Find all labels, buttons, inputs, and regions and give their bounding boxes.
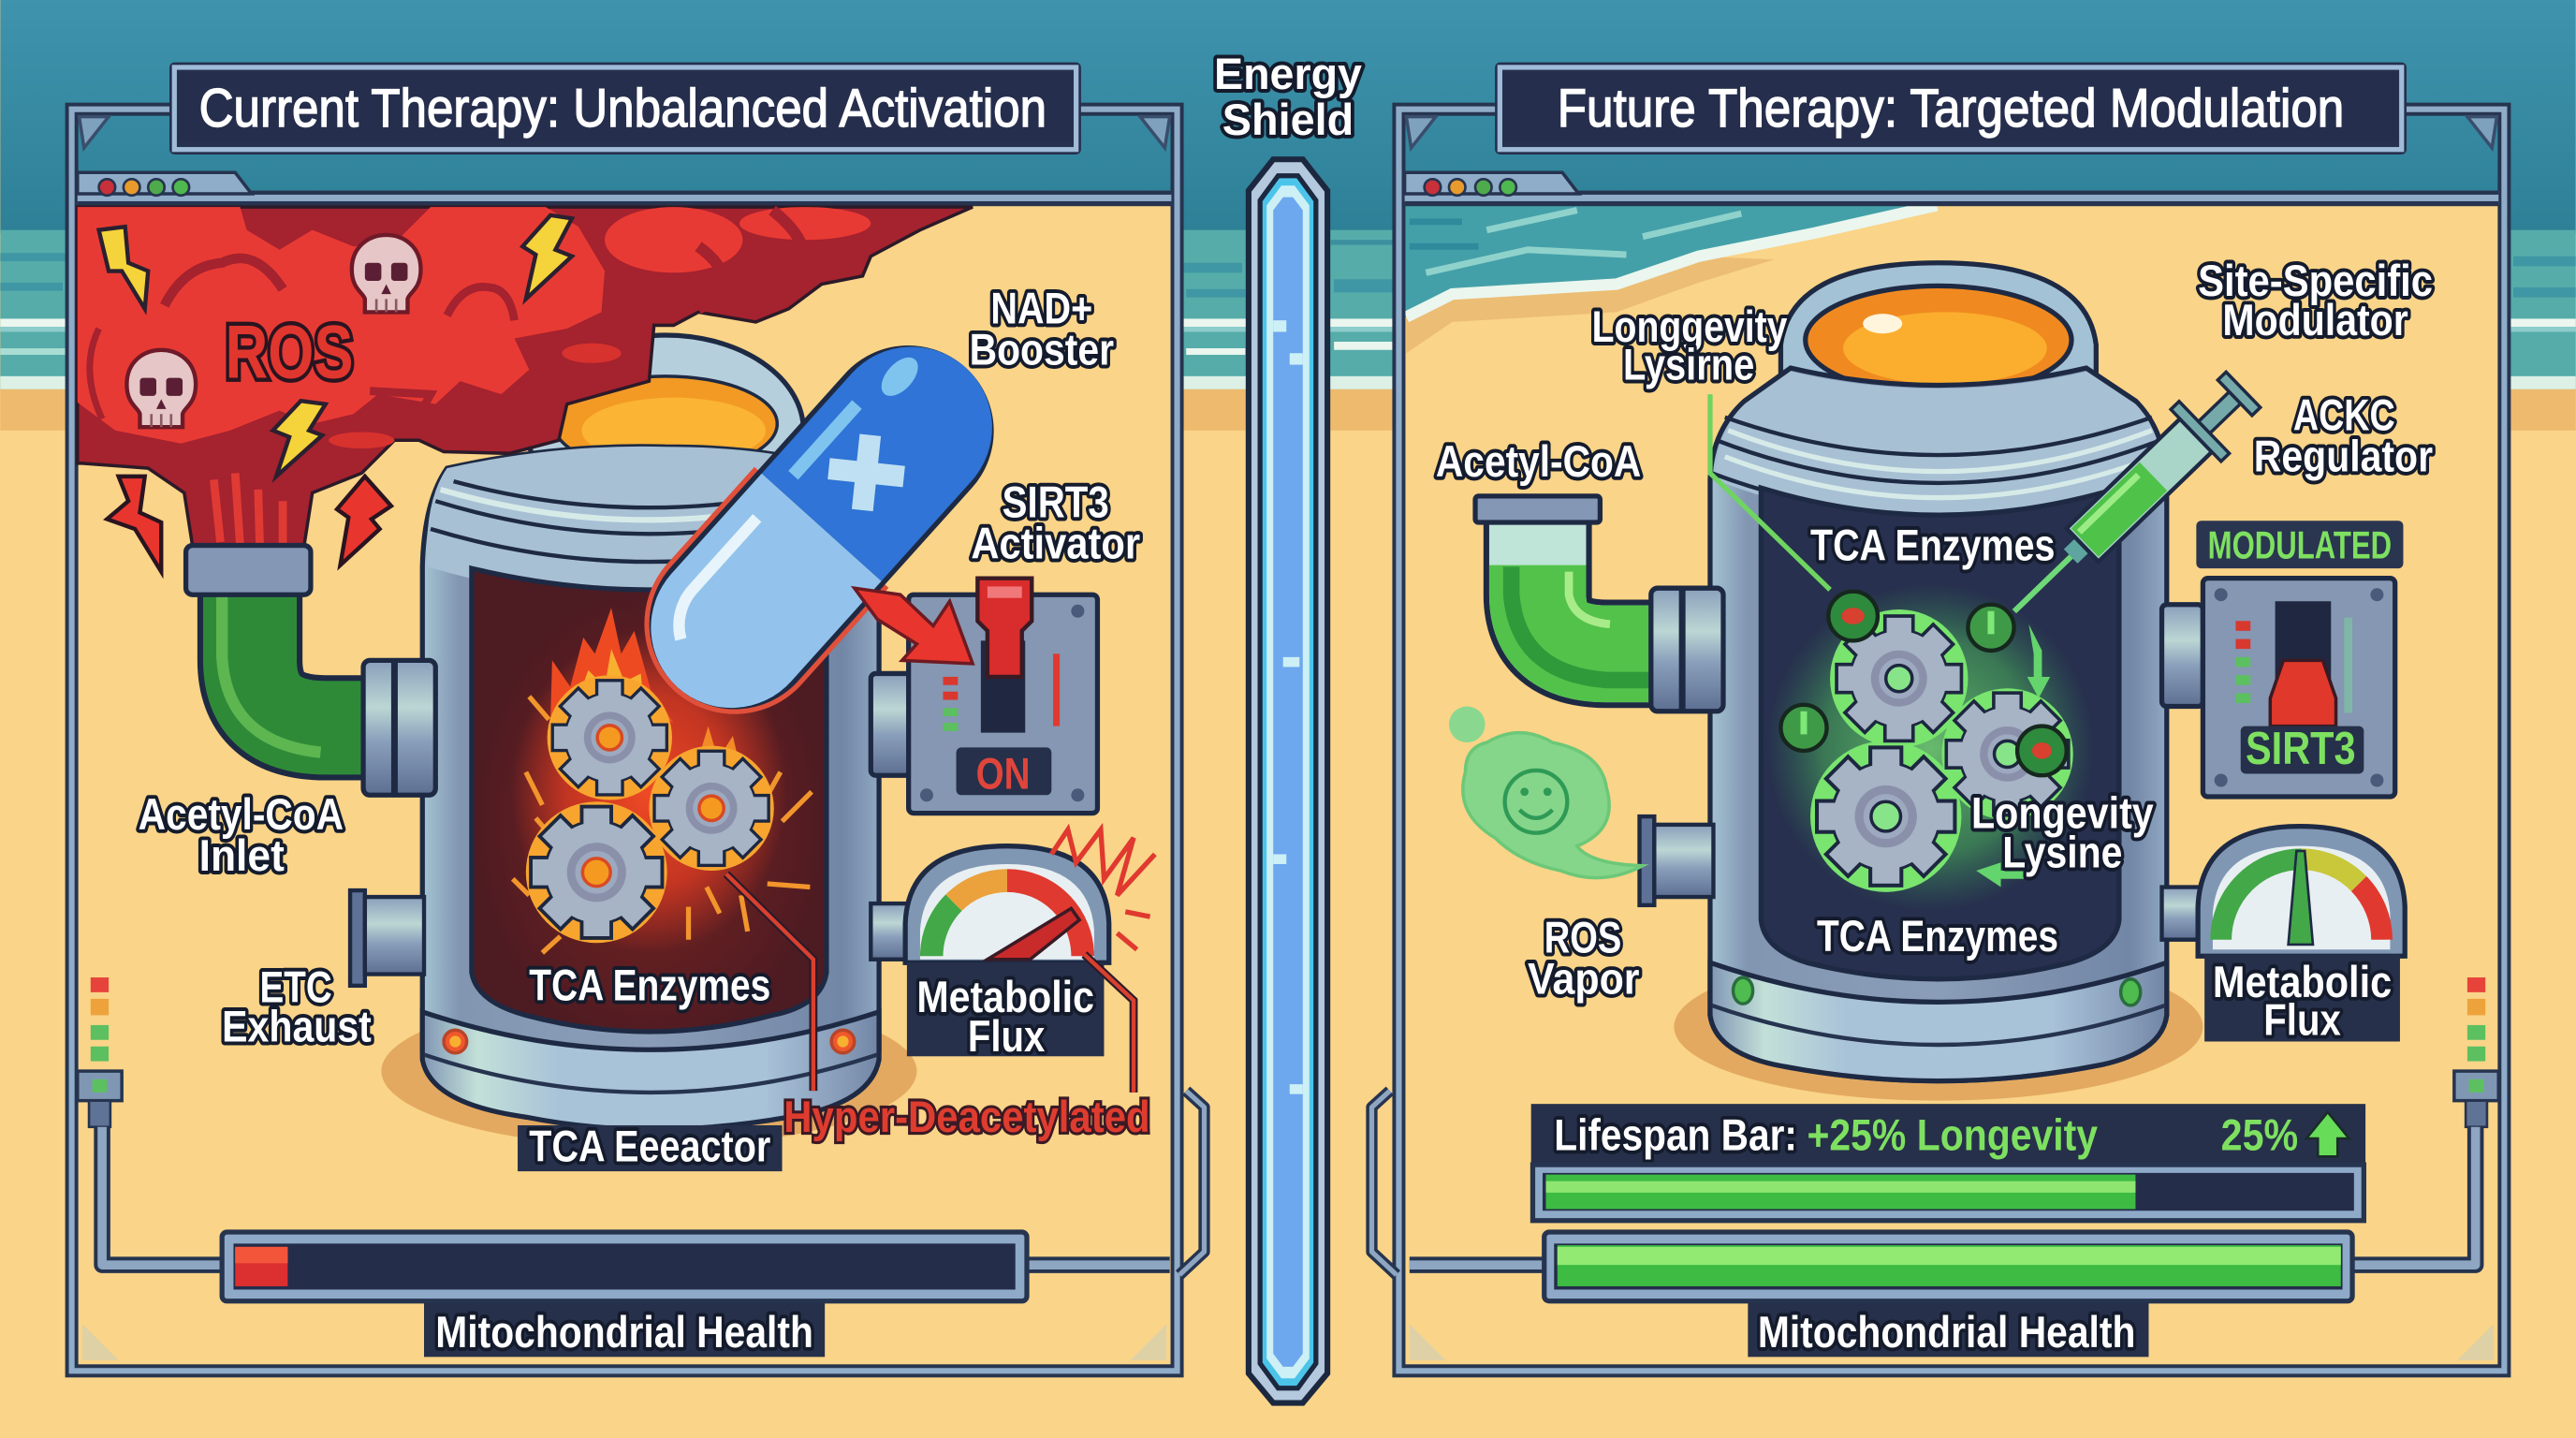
left panel: current therapy — [72, 63, 1205, 1371]
connection pipes to health bar — [1371, 1091, 2476, 1275]
labels: left and top callouts: Longgevity — [1592, 302, 1788, 352]
title: current therapy: Current Therapy: Unbalanced Activation — [199, 79, 1046, 139]
connection pipes to health bar — [102, 1091, 1205, 1275]
labels: modulator and regulator: Regulator — [2254, 433, 2433, 482]
window control lights — [1425, 179, 1516, 196]
modulator nodes — [1780, 592, 2067, 775]
reactor base: left — [422, 1012, 879, 1129]
gauge: metabolic flux right: Flux — [2263, 995, 2341, 1045]
labels: left and top callouts: Acetyl-CoA — [1436, 437, 1641, 487]
reactor dome: left — [528, 335, 803, 526]
health bar: right: Mitochondrial Health — [1758, 1308, 2135, 1357]
reactor base: right — [1710, 962, 2167, 1081]
label: reactor: TCA Eeeactor — [529, 1123, 770, 1172]
labels: modulator and regulator: Site-Specific — [2198, 257, 2433, 306]
status indicator lights with tower — [78, 977, 122, 1127]
left panel frame — [72, 110, 1178, 1371]
title: future therapy — [1495, 63, 2407, 154]
labels: inlet and exhaust: Inlet — [199, 831, 285, 881]
gauge: metabolic flux right: Metabolic — [2213, 958, 2392, 1007]
label: energy shield — [1214, 50, 1363, 145]
ROS cloud — [78, 207, 973, 572]
reactor chamber: right — [1761, 488, 2154, 979]
lifespan bar — [1531, 1104, 2365, 1221]
SIRT3 switch: on — [871, 579, 1097, 814]
health bar: left: Mitochondrial Health — [435, 1308, 813, 1357]
green inlet pipe: left — [186, 546, 435, 795]
labels: modulator and regulator: Modulator — [2222, 296, 2408, 345]
labels: left and top callouts — [1436, 302, 1788, 1005]
gauge: metabolic flux left: Flux — [968, 1012, 1045, 1062]
title: future therapy: Future Therapy: Targeted Modulation — [1558, 79, 2344, 139]
enzyme gears balanced — [1810, 609, 2073, 892]
capsule: NAD+ booster — [607, 307, 1032, 752]
skulls — [126, 235, 421, 427]
labels: modulator and regulator — [2198, 257, 2433, 482]
labels: booster and activator: NAD+ — [990, 285, 1092, 334]
leader lines: hyper-deacetylated — [726, 874, 1134, 1093]
labels: left and top callouts: Lysirne — [1623, 340, 1754, 389]
right panel frame — [1398, 110, 2504, 1371]
lifespan bar: +25% Longevity — [1807, 1110, 2099, 1160]
label: hyper-deacetylated: Hyper-Deacetylated — [783, 1093, 1150, 1142]
label: energy shield: Shield — [1222, 95, 1354, 145]
reactor: left — [381, 335, 916, 1147]
health bar: left — [222, 1232, 1027, 1357]
window control lights — [99, 179, 189, 196]
labels: inlet and exhaust: Acetyl-CoA — [139, 790, 344, 840]
labels: inlet and exhaust: ETC — [260, 962, 332, 1012]
label: longevity lysine inside chamber: Lysine — [2002, 828, 2122, 877]
energy shield — [1214, 50, 1363, 1403]
green inlet pipe: right — [1475, 496, 1723, 712]
label: ROS: ROS — [226, 311, 354, 395]
title: current therapy — [169, 63, 1081, 154]
rotation arrows — [1976, 624, 2050, 888]
arrow: capsule to switch — [855, 588, 973, 664]
gauge: metabolic flux left: Metabolic — [916, 973, 1094, 1022]
gauge: metabolic flux left — [871, 829, 1155, 1062]
leader line: longevity lysine — [1710, 394, 1830, 590]
label: longevity lysine inside chamber: Longevity — [1971, 788, 2154, 838]
icon: up arrow — [2306, 1112, 2349, 1156]
labels: booster and activator — [970, 285, 1140, 569]
label: longevity lysine inside chamber — [1971, 788, 2154, 877]
lifespan bar: Lifespan Bar: — [1554, 1110, 1797, 1160]
labels: modulator and regulator: ACKC — [2293, 391, 2395, 441]
syringe: site-specific modulator — [1989, 364, 2268, 638]
labels: inlet and exhaust — [139, 790, 372, 1051]
exhaust stub: ROS vapor — [1640, 816, 1713, 905]
labels: left and top callouts: ROS — [1544, 914, 1621, 963]
label: TCA enzymes: TCA Enzymes — [529, 961, 770, 1011]
SIRT3 switch: modulated: SIRT3 — [2246, 724, 2356, 774]
label: TCA enzymes lower: TCA Enzymes — [1817, 912, 2058, 961]
SIRT3 switch: modulated — [2162, 579, 2395, 797]
reactor dome: right — [1780, 263, 2096, 394]
status indicator lights with tower — [2454, 977, 2498, 1127]
reactor: right — [1674, 263, 2203, 1101]
label: ON: ON — [976, 749, 1031, 799]
labels: booster and activator: Activator — [971, 520, 1140, 569]
enzyme gears overheating — [526, 675, 774, 943]
label: energy shield: Energy — [1214, 50, 1363, 99]
bolts around cloud — [99, 215, 572, 572]
exhaust stub: ETC — [350, 890, 424, 986]
labels: inlet and exhaust: Exhaust — [222, 1002, 372, 1051]
right panel: future therapy — [1371, 63, 2504, 1371]
lifespan bar: 25% — [2221, 1110, 2298, 1160]
labels: left and top callouts: Vapor — [1528, 955, 1640, 1005]
gauge: metabolic flux right — [2162, 827, 2405, 1045]
badge: modulated: MODULATED — [2208, 523, 2392, 567]
labels: booster and activator: SIRT3 — [1003, 478, 1109, 528]
health bar: right — [1544, 1232, 2352, 1357]
label: TCA enzymes upper: TCA Enzymes — [1810, 521, 2055, 570]
smiling ROS vapor cloud — [1449, 707, 1643, 878]
labels: booster and activator: Booster — [970, 326, 1114, 375]
reactor chamber: left — [472, 568, 827, 1032]
